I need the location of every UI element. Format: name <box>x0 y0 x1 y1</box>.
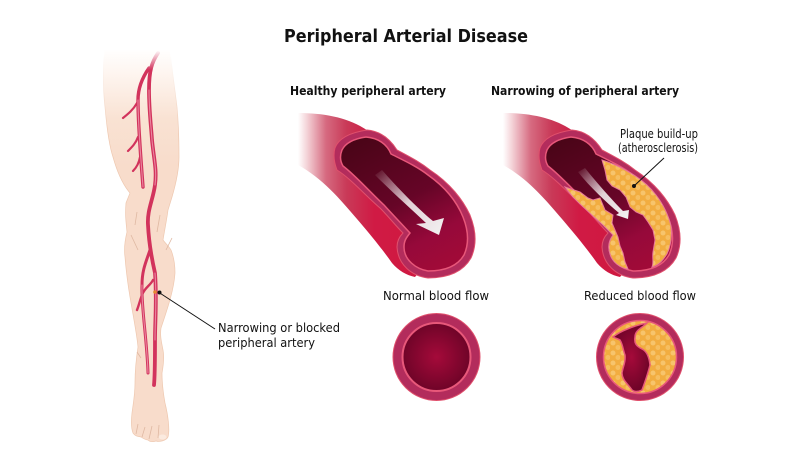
flow arrow <box>578 168 629 219</box>
narrowed artery <box>503 113 680 278</box>
flow arrow <box>375 170 444 235</box>
artery lumen <box>546 137 673 271</box>
heading: healthy: Healthy peripheral artery <box>290 84 446 98</box>
plaque lower <box>565 187 628 269</box>
leg callout <box>158 290 340 350</box>
title: Peripheral Arterial Disease <box>284 27 528 47</box>
leader line <box>159 292 215 329</box>
leader line <box>634 158 664 186</box>
narrowed lumen <box>613 323 650 392</box>
knee and toe creases <box>131 212 172 439</box>
artery outer wall <box>298 113 425 277</box>
plaque disc <box>604 320 676 394</box>
plaque label: Plaque build-up <box>620 127 698 141</box>
plaque upper <box>602 160 671 267</box>
plaque callout: (atherosclerosis) <box>618 141 698 155</box>
plaque callout <box>618 127 698 188</box>
label: normal blood flow: Normal blood flow <box>383 289 489 303</box>
leg illustration <box>103 50 179 442</box>
artery outer wall <box>503 113 630 277</box>
artery network <box>123 53 158 385</box>
leg callout: peripheral artery <box>218 336 315 350</box>
cross-section: reduced <box>596 314 684 400</box>
artery rim <box>539 130 680 278</box>
leg label: Narrowing or blocked <box>218 321 340 335</box>
healthy artery <box>298 113 475 278</box>
heading: narrowing: Narrowing of peripheral artery <box>491 84 679 98</box>
big toenail <box>158 434 166 440</box>
leg outline <box>103 50 179 442</box>
narrowing marker <box>153 290 157 294</box>
artery rim <box>334 130 475 278</box>
cross-section: normal <box>393 314 480 400</box>
label: reduced blood flow: Reduced blood flow <box>584 289 696 303</box>
artery lumen <box>341 137 468 271</box>
